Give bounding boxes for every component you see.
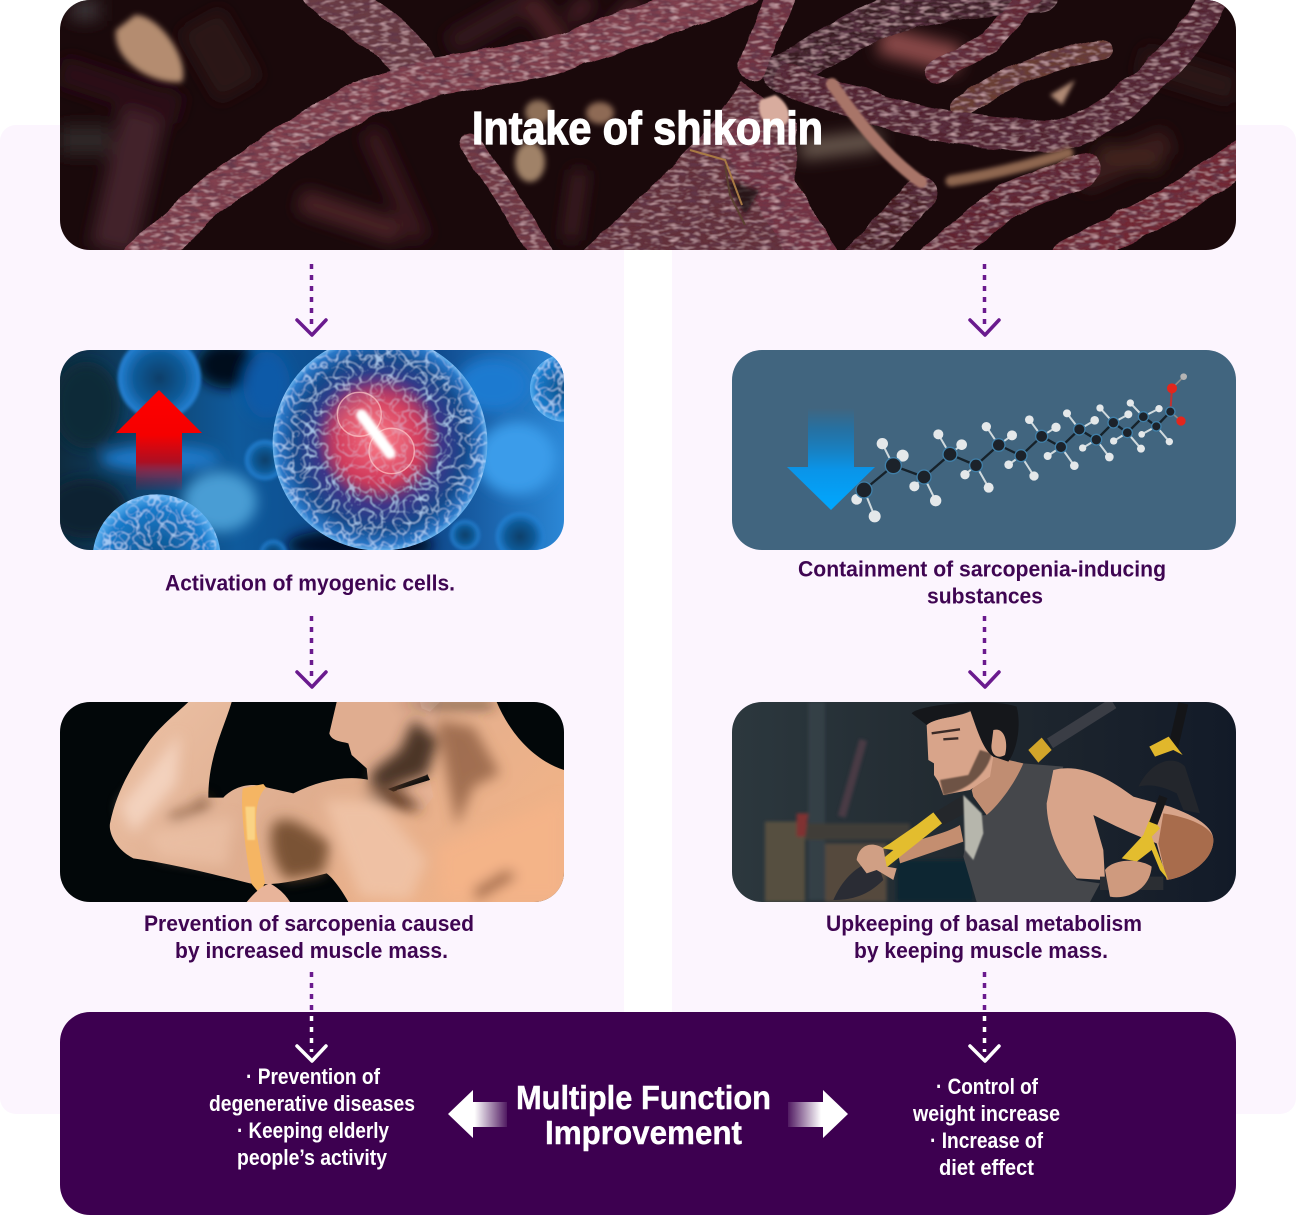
text: right benefits: · Control of: [936, 1074, 1039, 1099]
caption: upkeeping of basal metabolism: [826, 911, 1142, 963]
icon: red up arrow: [116, 390, 202, 490]
arrow: hero to containment: [970, 264, 999, 335]
text: right benefits: diet effect: [939, 1155, 1035, 1180]
image: molecule: [732, 350, 1236, 550]
caption: prevention of sarcopenia: Prevention of sarcopenia caused: [144, 911, 474, 936]
arrow: myogenic cells to muscle mass: [297, 616, 326, 687]
panel: multiple function improvement: [60, 1012, 1236, 1215]
heading: multiple function improvement: [516, 1079, 771, 1151]
image: man training with suspension straps: [730, 702, 1240, 902]
title: Intake of shikonin: Intake of shikonin: [472, 102, 823, 154]
icon: left white arrow: [448, 1090, 507, 1138]
caption: containment of sarcopenia-inducing substances: Containment of sarcopenia-inducing: [798, 556, 1166, 582]
image: myogenic cells: [60, 350, 564, 550]
caption: activation of myogenic cells: Activation of myogenic cells.: [165, 570, 455, 596]
text: left benefits: · Keeping elderly: [237, 1118, 390, 1143]
caption: upkeeping of basal metabolism: Upkeeping of basal metabolism: [826, 911, 1142, 936]
arrow: metabolism to right benefits: [970, 972, 999, 1061]
icon: blue down arrow: [787, 408, 875, 510]
panel: right background: [672, 125, 1296, 1114]
text: left benefits: degenerative diseases: [209, 1091, 415, 1116]
arrow: hero to myogenic cells: [297, 264, 326, 335]
text: right benefits: · Increase of: [930, 1128, 1044, 1153]
arrow: containment to metabolism: [970, 616, 999, 687]
caption: prevention of sarcopenia: by increased muscle mass.: [175, 938, 448, 963]
text: left benefits: people’s activity: [237, 1145, 388, 1170]
text: left benefits: [209, 1064, 415, 1170]
caption: upkeeping of basal metabolism: by keeping muscle mass.: [854, 938, 1108, 963]
heading: multiple function improvement: Multiple Function: [516, 1079, 771, 1116]
caption: prevention of sarcopenia: [144, 911, 474, 963]
text: left benefits: · Prevention of: [246, 1064, 381, 1089]
heading: multiple function improvement: Improvement: [545, 1114, 742, 1151]
hero photo: shikonin roots: [60, 0, 1245, 260]
text: right benefits: weight increase: [912, 1101, 1060, 1126]
panel: left background: [0, 125, 624, 1114]
image: arm and measuring tape: [60, 702, 564, 902]
icon: right white arrow: [788, 1090, 848, 1138]
arrow: muscle mass to left benefits: [297, 972, 326, 1061]
text: right benefits: [912, 1074, 1060, 1180]
caption: containment of sarcopenia-inducing substances: substances: [927, 584, 1043, 608]
caption: containment of sarcopenia-inducing substances: [798, 556, 1166, 608]
